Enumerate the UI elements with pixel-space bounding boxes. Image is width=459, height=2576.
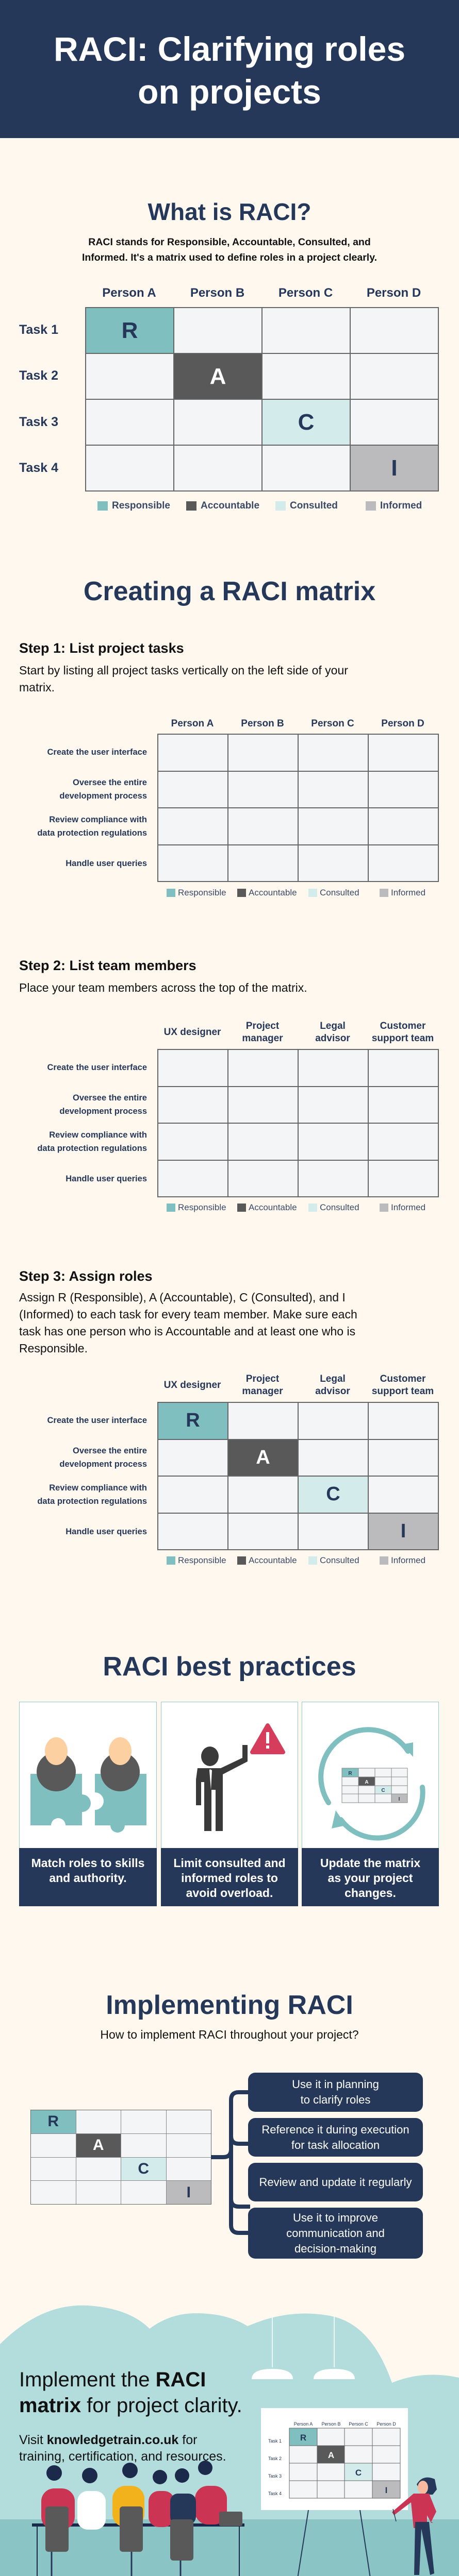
intro text: RACI stands for Responsible, Accountable, Consulted, and [88,236,371,248]
grid: I [401,1520,406,1542]
legend [167,1555,425,1565]
call to action text [19,2433,226,2464]
row labels: Handle user queries [65,859,147,868]
intro text: Informed. It's a matrix used to define roles in a project clearly. [82,252,377,263]
column headers: Legal [320,1021,346,1031]
legend: Responsible [178,888,226,897]
step box 3 [248,2163,423,2201]
row labels: Create the user interface [47,748,147,757]
lamps [272,2316,334,2367]
row labels: data protection regulations [37,1144,147,1153]
row labels: Review compliance with [49,1483,147,1493]
grid [85,307,439,492]
step 3 text: Assign R (Responsible), A (Accountable), C (Consulted), and I [19,1291,346,1304]
grid: C [298,409,314,435]
footer scene illustration: Task 1 [268,2438,282,2444]
step 3 heading: Step 3: Assign roles [19,1268,153,1284]
row labels: Handle user queries [65,1527,147,1536]
call to action headline [19,2368,242,2417]
heading: What is RACI?: What is RACI? [148,198,311,225]
row labels: development process [59,1460,147,1469]
row labels: development process [59,791,147,801]
row labels: Create the user interface [47,1063,147,1072]
easel and board [297,2510,371,2576]
caption [302,1848,439,1906]
column headers: advisor [315,1386,350,1397]
matrix step 2 [37,1021,439,1212]
title [54,30,405,111]
footer scene illustration [0,2305,459,2576]
column headers: Person C [278,286,333,300]
matrix 1 [19,286,439,511]
header banner [0,0,459,138]
icon: cycle with matrix: A [365,1780,369,1785]
column headers: Person D [381,718,424,729]
legend: Responsible [178,1555,226,1565]
footer scene illustration: C [355,2468,362,2478]
presenter [417,2478,437,2495]
row labels [37,748,147,868]
footer scene illustration: Person D [376,2421,396,2427]
legend: Accountable [249,1202,297,1212]
legend [97,500,422,511]
step box 2: for task allocation [291,2138,380,2151]
step 1 text [19,664,348,694]
column headers: Customer [380,1374,425,1384]
step box 4: Use it to improve [293,2211,378,2224]
row labels: Task 1 [19,323,58,337]
grid [157,1049,439,1197]
column headers: Person B [190,286,244,300]
footer scene illustration: Person B [321,2421,341,2427]
footer scene illustration: I [385,2485,387,2495]
matrix step 1 [37,718,439,897]
row labels: Task 4 [19,461,58,475]
heading: Implementing RACI: Implementing RACI [106,1990,353,2020]
call to action text: Visit knowledgetrain.co.uk for [19,2433,197,2447]
call to action headline: Implement the RACI [19,2368,206,2391]
column headers: Project [246,1021,279,1031]
step box 3: Review and update it regularly [259,2175,412,2189]
small matrix [30,2110,211,2205]
step 3 text: task has one person who is Accountable and at least one who is [19,1325,355,1338]
legend: Responsible [178,1202,226,1212]
caption: Match roles to skills [31,1856,144,1870]
footer scene illustration: Task 2 [268,2456,282,2461]
row labels: Oversee the entire [73,1446,147,1455]
caption: Update the matrix [320,1856,420,1870]
legend [167,1202,425,1212]
legend: Accountable [249,1555,297,1565]
caption [161,1848,298,1906]
column headers: manager [242,1386,283,1397]
legend: Informed [380,500,422,511]
step box 4 [248,2208,423,2259]
step box 4: communication and [286,2227,385,2239]
column headers: Legal [320,1374,346,1384]
caption: Limit consulted and [173,1856,286,1870]
step box 2 [248,2118,423,2157]
column headers: support team [372,1033,434,1044]
intro text [82,236,377,263]
column headers: UX designer [164,1027,221,1038]
grid: A [210,364,226,388]
grid: I [391,455,398,480]
legend: Informed [391,888,425,897]
step 1 text: Start by listing all project tasks vertically on the left side of your [19,664,348,677]
legend: Informed [391,1202,425,1212]
column headers: manager [242,1033,283,1044]
card: update matrix [302,1702,439,1906]
step 2 heading: Step 2: List team members [19,958,196,973]
card: match roles [19,1702,157,1906]
column headers: Person A [171,718,214,729]
row labels: Oversee the entire [73,1093,147,1103]
footer scene illustration: Task 3 [268,2473,282,2479]
matrix step 3 [37,1374,439,1565]
column headers [164,1374,434,1397]
row labels [19,323,58,475]
row labels [37,1416,147,1536]
heading: RACI best practices: RACI best practices [103,1652,356,1682]
icon: cycle with matrix: C [381,1788,385,1793]
icon: cycle with matrix [318,1727,425,1840]
column headers: support team [372,1386,434,1397]
icon: cycle with matrix: R [348,1771,352,1776]
caption: informed roles to [181,1871,278,1885]
row labels: Create the user interface [47,1416,147,1425]
grid: A [256,1447,270,1468]
step box 2: Reference it during execution [261,2123,409,2136]
title: on projects [138,73,321,111]
legend: Accountable [201,500,259,511]
column headers: Person B [241,718,284,729]
legend: Consulted [320,1202,359,1212]
column headers: UX designer [164,1380,221,1391]
row labels [37,1063,147,1183]
step 2 text: Place your team members across the top of the matrix. [19,981,307,994]
subtitle: How to implement RACI throughout your project? [100,2028,359,2041]
grid: R [122,317,138,343]
grid: R [186,1410,200,1431]
call to action headline: matrix for project clarity. [19,2394,242,2417]
small matrix: R [47,2113,59,2130]
caption: as your project [328,1871,413,1885]
row labels: Handle user queries [65,1174,147,1183]
legend: Responsible [112,500,170,511]
row labels: Review compliance with [49,1130,147,1140]
bracket connector [211,2090,250,2235]
table and people [32,2523,244,2527]
column headers [171,718,424,729]
column headers: Person C [311,718,354,729]
legend: Accountable [249,888,297,897]
step 3 text [19,1291,357,1355]
legend: Consulted [320,1555,359,1565]
row labels: Task 2 [19,368,58,383]
icon: man with warning [196,1723,285,1831]
step 1 heading: Step 1: List project tasks [19,640,184,656]
small matrix: C [138,2160,149,2177]
column headers [164,1021,434,1044]
column headers: Person D [367,286,421,300]
footer scene illustration: Person C [349,2421,368,2427]
footer scene illustration: Person A [294,2421,313,2427]
grid [157,734,439,882]
column headers: advisor [315,1033,350,1044]
legend: Consulted [320,888,359,897]
row labels: Review compliance with [49,815,147,824]
step box 1: to clarify roles [301,2093,370,2106]
step box 4: decision-making [294,2242,376,2255]
footer scene illustration: R [300,2433,306,2443]
row labels: development process [59,1107,147,1116]
step box 1 [248,2073,423,2112]
grid [157,1402,439,1550]
footer scene illustration: A [328,2450,334,2460]
icon: cycle with matrix: I [399,1797,400,1802]
step box 1: Use it in planning [292,2078,379,2091]
caption: changes. [345,1886,396,1900]
column headers: Customer [380,1021,425,1031]
row labels: data protection regulations [37,1497,147,1506]
small matrix: A [93,2137,104,2154]
legend: Consulted [290,500,338,511]
caption: and authority. [49,1871,127,1885]
row labels: data protection regulations [37,828,147,838]
icon: puzzle people [30,1737,146,1833]
column headers: Project [246,1374,279,1384]
title: RACI: Clarifying roles [54,30,405,68]
legend [167,888,425,897]
column headers: Person A [102,286,156,300]
caption: avoid overload. [186,1886,273,1900]
column headers [102,286,421,300]
heading: Creating a RACI matrix: Creating a RACI matrix [84,577,375,606]
row labels: Task 3 [19,415,58,429]
step 3 text: Responsible. [19,1342,88,1355]
caption [19,1848,157,1906]
step 1 text: matrix. [19,681,55,694]
legend: Informed [391,1555,425,1565]
step 3 text: (Informed) to each task for every team member. Make sure each [19,1308,357,1321]
grid: C [326,1483,340,1505]
call to action text: training, certification, and resources. [19,2449,226,2464]
footer scene illustration: Task 4 [268,2491,282,2496]
small matrix: I [187,2184,191,2201]
row labels: Oversee the entire [73,778,147,787]
card: limit consulted [161,1702,298,1906]
